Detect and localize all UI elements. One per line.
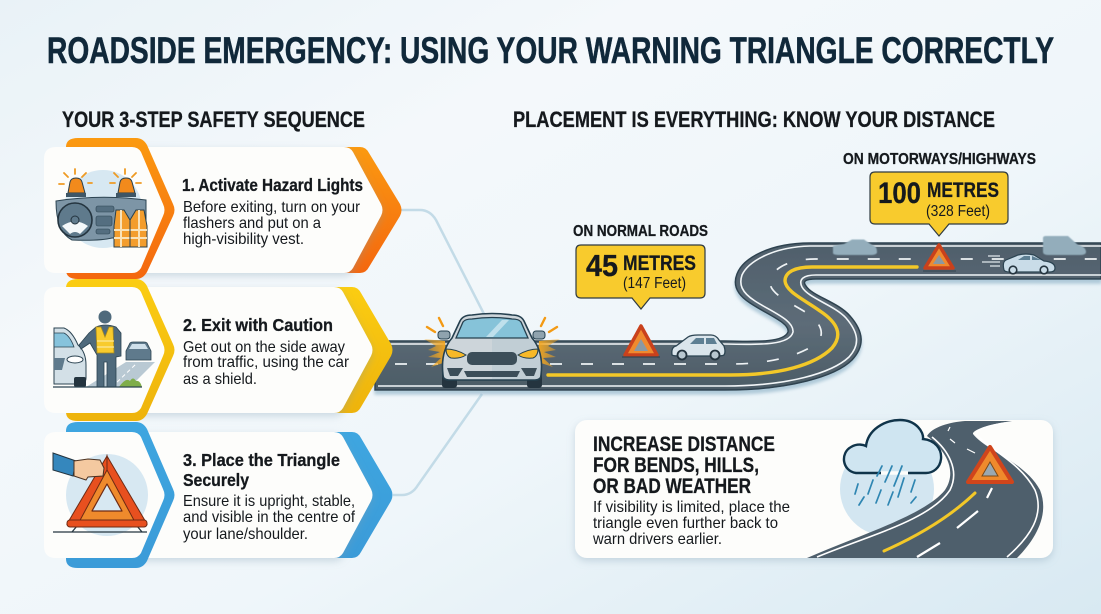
heading: increase distance: OR BAD WEATHER [593, 475, 751, 498]
distant car [126, 342, 151, 360]
text: step 1: Before exiting, turn on your [183, 199, 361, 216]
text: step 2: Get out on the side away [183, 339, 345, 356]
car with hazard lights [424, 314, 560, 388]
orange chevron [66, 138, 174, 279]
heading: increase distance [593, 433, 775, 498]
warning triangle: 45 m [622, 326, 660, 357]
text: step 1 [182, 175, 363, 248]
text: step 1: flashers and put on a [183, 215, 321, 232]
body shading [492, 339, 540, 379]
callout: 45 metres: METRES [623, 252, 696, 275]
blue backing [330, 432, 392, 558]
beacons [68, 178, 135, 193]
callout: 100 metres: (328 Feet) [926, 203, 990, 220]
car wheels [442, 370, 457, 388]
white card [130, 432, 372, 558]
panel: bad weather [575, 420, 1053, 558]
label: motorways: ON MOTORWAYS/HIGHWAYS [843, 151, 1036, 168]
vest [114, 210, 147, 247]
curved road [807, 421, 1043, 558]
ghost car on motorway [833, 240, 877, 255]
icon panel [44, 287, 164, 413]
body text: triangle even further back to [593, 515, 778, 532]
text: step 3: your lane/shoulder. [183, 526, 308, 543]
callout: 45 metres: (147 Feet) [623, 275, 686, 292]
callout: 100 metres: 100 [878, 177, 921, 210]
text: step 1: high-visibility vest. [183, 231, 304, 248]
panel: step 3 [44, 422, 392, 568]
blue chevron [66, 422, 174, 568]
panel: step 2 [44, 279, 392, 421]
yellow line [548, 267, 917, 375]
icon panel [44, 147, 164, 273]
warning triangle [968, 447, 1012, 482]
heading: increase distance: FOR BENDS, HILLS, [593, 454, 759, 477]
person [98, 310, 112, 324]
icon: dashboard and vest [56, 169, 147, 248]
windshield glare [486, 320, 509, 337]
text: step 3: Ensure it is upright, stable, [183, 493, 355, 510]
sleeve [53, 453, 76, 476]
ghost van on motorway [1043, 236, 1086, 255]
icon: hand placing triangle [53, 453, 148, 536]
near car [54, 328, 86, 384]
callout: 100 metres: METRES [927, 179, 999, 202]
headlights [446, 349, 466, 358]
text: step 3: and visible in the centre of [183, 509, 356, 526]
text: step 2: as a shield. [183, 371, 257, 388]
text: step 1: 1. Activate Hazard Lights [182, 175, 363, 195]
yellow chevron [66, 279, 174, 421]
road surface [375, 243, 1101, 390]
body text: warn drivers earlier. [592, 531, 722, 548]
heading: placement: PLACEMENT IS EVERYTHING: KNOW YOUR DISTANCE [513, 107, 995, 132]
ground [53, 531, 147, 533]
orange backing [340, 147, 402, 273]
white card [130, 287, 372, 413]
grille [467, 352, 517, 365]
callout: 45 metres: 45 [586, 248, 618, 283]
road [375, 243, 1101, 390]
white card [130, 147, 382, 273]
triangle [71, 459, 143, 523]
body text: If visibility is limited, place the [593, 499, 790, 516]
text: step 3: Securely [183, 470, 249, 490]
ground [53, 386, 142, 388]
body text [592, 499, 790, 548]
moving car on motorway [982, 254, 1055, 274]
road edge lines [378, 246, 1101, 386]
panel: step 1 [44, 138, 402, 279]
road wedge [86, 362, 155, 387]
dashboard [56, 197, 146, 240]
hazard glow [424, 339, 446, 367]
hazard rays [427, 318, 557, 332]
callout: 45 metres [576, 245, 705, 309]
label: normal roads: ON NORMAL ROADS [573, 223, 708, 240]
small car on normal road [672, 335, 725, 360]
sky circle [840, 442, 934, 536]
mirrors [438, 331, 450, 339]
text: step 2 [183, 315, 350, 388]
text: step 3 [183, 450, 356, 543]
hand [74, 459, 104, 480]
lower bumper [447, 368, 537, 377]
connector lines from steps to car [393, 210, 484, 495]
centre dashes [395, 259, 1101, 364]
grass [119, 378, 142, 387]
warning triangle: 100 m [923, 245, 956, 271]
text: step 2: from traffic, using the car [183, 354, 350, 371]
callout: 100 metres [870, 172, 1008, 236]
car body [442, 314, 542, 380]
triangle legs [72, 526, 142, 532]
icon: rain cloud [844, 420, 941, 505]
windshield [456, 318, 528, 338]
text: step 2: 2. Exit with Caution [183, 315, 333, 335]
hazard glow right [538, 339, 560, 367]
heading: safety sequence: YOUR 3-STEP SAFETY SEQUENCE [62, 107, 365, 132]
heading: increase distance: INCREASE DISTANCE [593, 433, 775, 456]
icon panel [44, 432, 164, 558]
icon: person beside car [53, 310, 155, 387]
yellow backing [330, 287, 392, 413]
text: step 3: 3. Place the Triangle [183, 450, 340, 470]
panel background [575, 420, 1053, 558]
